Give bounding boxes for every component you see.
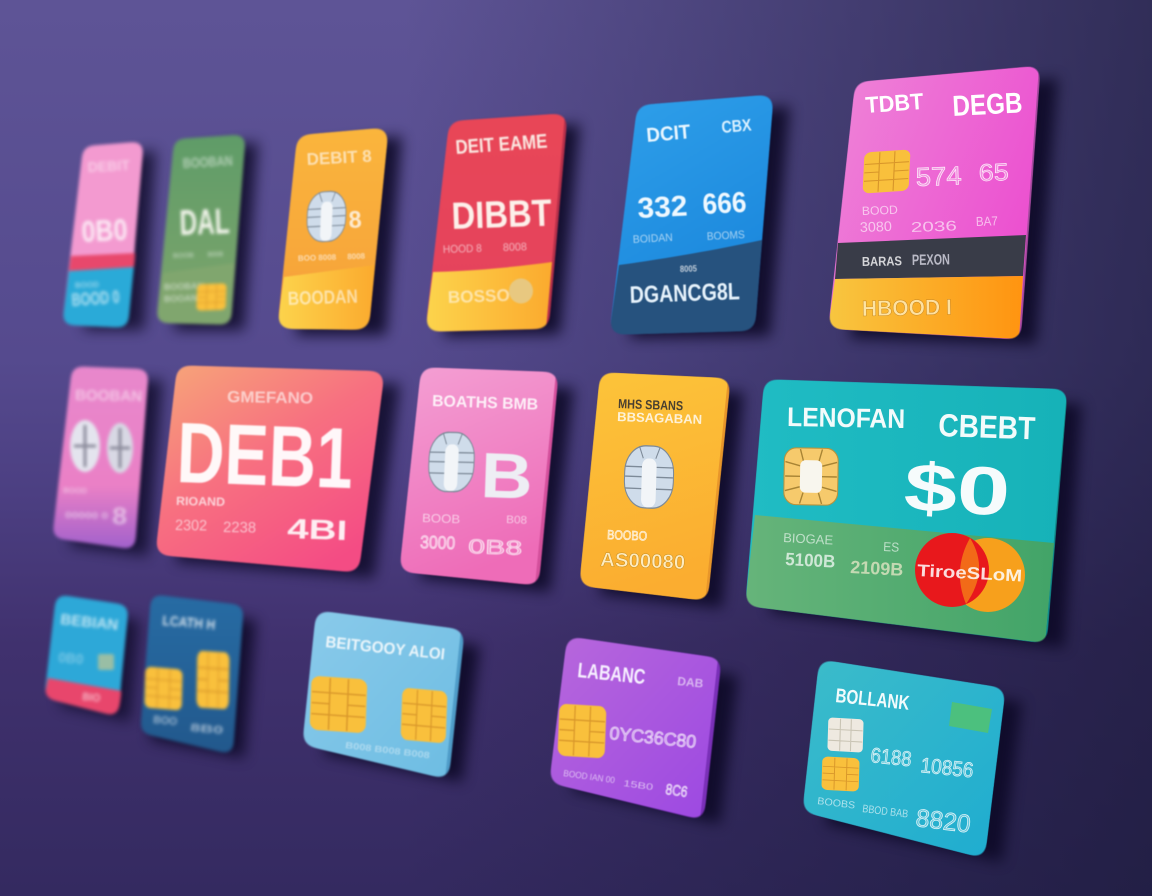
card 11: teal and green large card: LENOFAN [787,402,905,434]
icon: chip [196,283,227,311]
card 7: pink purple with silver circles: BOOBAN [75,387,142,405]
card 1: pink and teal [62,141,156,330]
card 12: small blue card: BIO [82,691,101,705]
card 14: light blue with two chips: B008 B008 B008 [345,740,430,760]
icon: silver circles [70,420,133,473]
card 4: red DIBBT: DEIT EAME [455,131,548,159]
card 16: cyan with chips: BBOD BAB [862,803,909,821]
card 2: green DAL [156,134,258,330]
card 7: pink purple with silver circles [52,366,163,556]
card 5: blue: DGANCG8L [629,278,740,309]
icon: gold chip [784,448,838,505]
card 11: teal and green large card: $0 [902,449,1012,531]
card 5: blue [609,94,790,338]
card 16: cyan with chips: 6188 [869,744,913,771]
card 11: teal and green large card: CBEBT [938,407,1036,446]
card 14: light blue with two chips: BEITGOOY ALOI [325,634,446,664]
icon: silver chip [827,717,864,753]
card 6: magenta with chip: 574 [915,160,962,192]
card 6: magenta with chip: HBOOD I [862,294,952,321]
card 9: pink with silver chip: B [480,439,534,513]
card 6: magenta with chip: BARAS [862,253,902,269]
card 15: purple with chip: 15B0 [623,778,654,792]
card 2: green DAL: BOOAN [164,293,198,304]
card 5: blue: 8005 [680,263,697,274]
card 7: pink purple with silver circles: BOOD [63,486,87,495]
card 9: pink with silver chip: BOOB [422,511,460,526]
card 11: teal and green large card [745,379,1082,648]
card 10: yellow with silver chip [579,372,744,608]
card 11: teal and green large card: ES [883,539,900,555]
card 8: coral DEBT: RIOAND [176,494,226,509]
card 15: purple with chip: 8C6 [664,781,689,801]
card 2: green DAL: DAL [179,200,230,243]
card 9: pink with silver chip: 3000 [420,532,456,553]
card 4: red DIBBT: HOOD 8 [443,243,482,256]
card 6: magenta with chip: TDBT [865,88,924,118]
card 15: purple with chip: 0YC36C80 [609,723,697,752]
card 6: magenta with chip: 65 [978,159,1009,187]
card 8: coral DEBT: 2238 [223,519,256,537]
card 16: cyan with chips: 10856 [919,754,975,783]
icon: gold chip [558,704,606,758]
card 6: magenta with chip: 3080 [860,218,892,235]
card 10: yellow with silver chip: MHS SBANS [618,396,684,413]
card 8: coral DEBT: 4BI [287,513,348,546]
card 3: yellow: 8 [348,206,362,234]
card 15: purple with chip: DAB [677,674,704,691]
card 11: teal and green large card: 5100B [785,549,836,572]
card 12: small blue card [44,594,140,722]
card 8: coral DEBT [155,365,400,578]
card 5: blue: BOOMS [707,229,745,243]
icon: silver chip [306,191,347,242]
card 2: green DAL: BOOBAN [182,152,233,171]
card 12: small blue card: BEBIAN [60,611,119,634]
card 5: blue: 666 [702,187,747,221]
icon: gold chip [862,149,911,194]
card 6: magenta with chip: DEGB [952,87,1023,123]
card 6: magenta with chip: BOOD [862,203,898,218]
card 1: pink and teal: BOOD 0 [71,287,120,310]
icon: green hologram [949,702,992,733]
icon: silver chip [624,445,674,509]
card 5: blue: DCIT [646,121,691,147]
card 11: teal and green large card: BIOGAE [783,530,834,548]
card 15: purple with chip [549,636,738,824]
card 16: cyan with chips: 8820 [914,804,972,839]
card 10: yellow with silver chip: AS00080 [600,549,686,574]
card 11: teal and green large card: TiroeSLoM [917,561,1023,585]
card 4: red DIBBT [425,113,580,336]
card 12: small blue card: 0B0 [58,649,84,667]
card 6: magenta with chip: BA7 [976,213,998,229]
card 2: green DAL: BOOB 8008 [173,251,223,260]
card 5: blue: CBX [721,115,753,137]
card 1: pink and teal: DEBIT [87,157,131,175]
card 11: teal and green large card: 2109B [850,557,904,580]
card 8: coral DEBT: DEB1 [175,405,355,507]
icon: gold chip [821,756,860,792]
icon: gold chips [144,651,230,711]
icon: gold chips [310,676,448,743]
card 15: purple with chip: LABANC [576,659,647,689]
card 9: pink with silver chip: B08 [506,514,527,527]
card 6: magenta with chip: 2036 [911,217,957,235]
card 9: pink with silver chip [399,367,574,592]
card 3: yellow: DEBIT 8 [306,147,372,169]
card 9: pink with silver chip: BOATHS BMB [432,393,538,414]
card 16: cyan with chips: BOLLANK [834,685,911,715]
card 13: navy card with two chips: BOO [153,714,178,728]
card 6: magenta with chip [828,65,1058,344]
card 3: yellow: BOO 8008 8008 [298,252,366,263]
card 14: light blue with two chips [302,610,480,782]
card 15: purple with chip: BOOD IAN 00 [563,768,616,785]
card 4: red DIBBT: BOSSO [447,286,510,307]
card 3: yellow: BOODAN [287,287,358,310]
card 4: red DIBBT: 8008 [503,241,527,254]
card 8: coral DEBT: 2302 [175,517,207,535]
card 1: pink and teal: BOOD [75,280,99,290]
card 3: yellow [277,127,402,335]
card 13: navy card with two chips: LCATH H [162,612,216,633]
card 10: yellow with silver chip: BOOBO [607,527,647,543]
card 6: magenta with chip: PEXON [912,251,950,269]
card 7: pink purple with silver circles: 00000 0 [65,510,108,521]
card 5: blue: BOIDAN [633,232,673,246]
card 1: pink and teal: 0B0 [81,214,128,249]
card 5: blue: 332 [637,190,688,225]
card 13: navy card with two chips [140,594,256,758]
card 9: pink with silver chip: 0B8 [468,536,523,560]
card 4: red DIBBT: DIBBT [451,193,552,238]
card 16: cyan with chips [802,659,1022,862]
icon: coin [509,278,533,304]
card 7: pink purple with silver circles: 8 [112,503,127,530]
card 8: coral DEBT: GMEFANO [227,389,313,408]
card 10: yellow with silver chip: BBSAGABAN [617,409,702,427]
card 13: navy card with two chips: 8B0 [190,722,224,737]
icon: silver chip [428,432,475,492]
card 16: cyan with chips: BOOBS [817,796,856,812]
card 2: green DAL: BOOBAN [164,281,204,292]
icon: payment network circles [915,533,1025,612]
